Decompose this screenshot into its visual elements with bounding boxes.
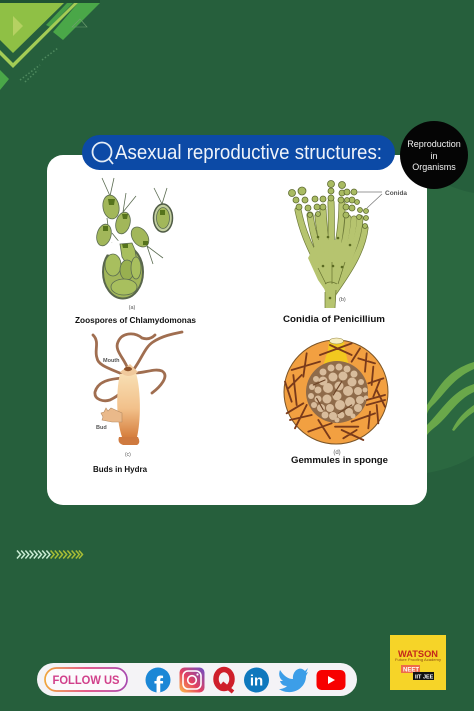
label: Conida: Conida [385, 190, 407, 197]
follow us button [45, 668, 127, 691]
white content card [47, 155, 427, 505]
chevron strip [17, 550, 82, 558]
logo: Watson: NEET [403, 668, 419, 674]
social bar [37, 663, 357, 696]
icon: youtube [316, 670, 346, 690]
icon: linkedin: in [250, 672, 263, 690]
caption: Chlamydomonas: Zoospores of Chlamydomonas [75, 316, 197, 325]
topic badge: in [430, 151, 438, 161]
icon: magnifier [92, 142, 113, 164]
label (a): (a) [129, 305, 136, 311]
logo: Watson [390, 635, 446, 690]
diagram: Chlamydomonas zoospores [94, 178, 172, 298]
logo: Watson: WATSON [398, 649, 438, 660]
icon: facebook [146, 668, 170, 692]
label (c): (c) [125, 452, 131, 458]
top-left decorative triangles [0, 0, 100, 90]
diagram: Penicillium conidia [288, 180, 407, 308]
icon: quora [216, 670, 233, 692]
caption: Penicillium: Conidia of Penicillium [283, 314, 385, 324]
topic badge [400, 121, 468, 189]
logo: Watson: IIT JEE [415, 674, 434, 680]
diagram: Hydra [93, 332, 182, 458]
caption: sponge: Gemmules in sponge [291, 455, 388, 465]
icon: instagram [180, 668, 204, 692]
right background swoosh [427, 175, 474, 473]
topic badge: Reproduction [407, 139, 461, 149]
icon: twitter [279, 668, 308, 692]
icon: linkedin [244, 668, 269, 692]
follow us button: FOLLOW US [52, 673, 120, 687]
label: Bud: Bud [96, 425, 107, 431]
diagram: sponge gemmule [284, 338, 388, 456]
label (b): (b) [339, 297, 346, 303]
logo: Watson: Future Proofing Academy [395, 658, 441, 662]
label: Mouth: Mouth [103, 358, 120, 364]
heading: Asexual reproductive structures: [115, 142, 382, 164]
label (d): (d) [333, 450, 341, 456]
topic badge: Organisms [412, 162, 456, 172]
caption: Hydra: Buds in Hydra [93, 464, 147, 474]
icon: facebook: f [154, 671, 164, 701]
header pill [82, 135, 395, 170]
